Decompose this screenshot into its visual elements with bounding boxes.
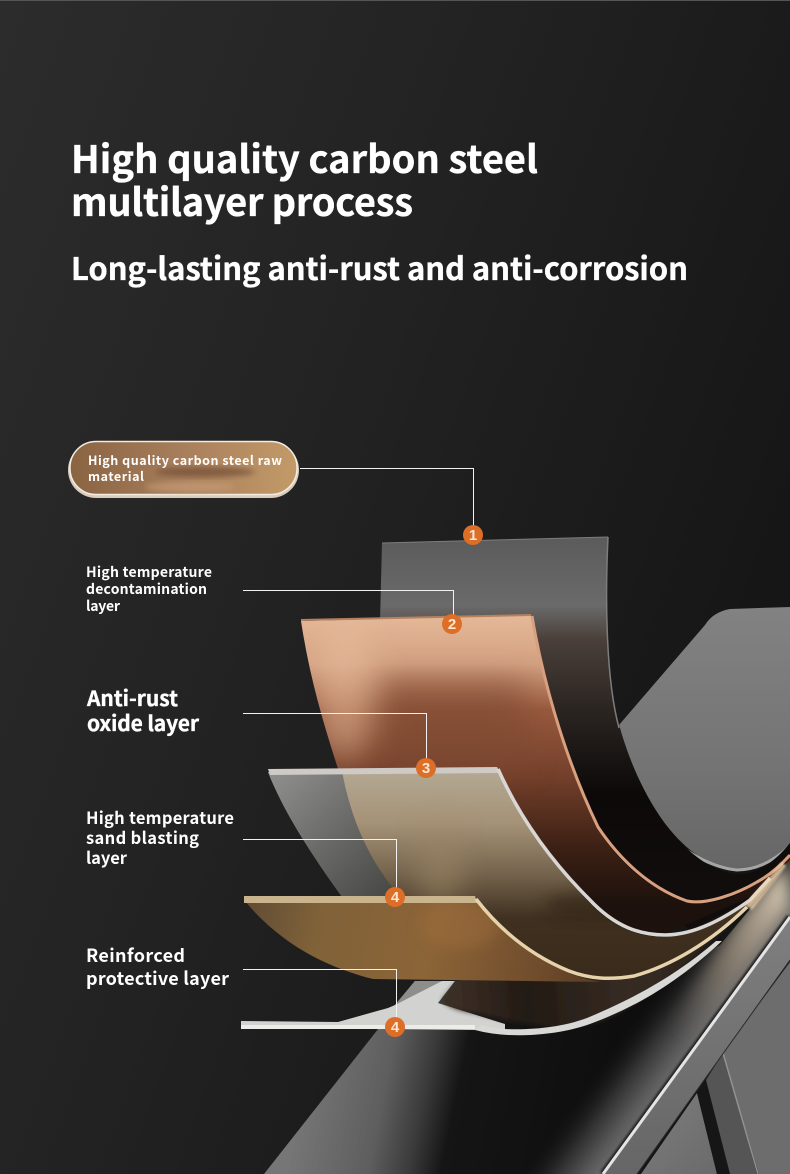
label pill: raw material: material — [88, 466, 144, 485]
badge 2: 2 — [448, 616, 456, 633]
layer 4: sand blasting gold layer — [244, 896, 747, 982]
label: anti-rust oxide layer: Anti-rust — [86, 683, 178, 713]
layer 2: copper decontamination layer — [301, 615, 790, 940]
label: anti-rust oxide layer: oxide layer — [87, 708, 200, 738]
label pill: raw material: High quality carbon steel raw — [88, 450, 282, 469]
badge 3 — [416, 758, 436, 778]
label: sand blasting layer: High temperature — [86, 805, 234, 829]
label: sand blasting layer: sand blasting — [86, 825, 199, 849]
label: reinforced protective layer: Reinforced — [86, 942, 185, 968]
badge 4 upper: 4 — [391, 889, 400, 906]
label: sand blasting layer: layer — [86, 845, 128, 869]
title: multilayer process — [71, 172, 413, 227]
right steel panels — [603, 917, 790, 1174]
label: decontamination layer: decontamination — [86, 579, 207, 599]
label: reinforced protective layer: protective layer — [86, 965, 229, 991]
label: decontamination layer: High temperature — [86, 562, 212, 582]
title — [71, 129, 538, 227]
badge 4 lower — [385, 1017, 405, 1037]
label: sand blasting layer — [86, 805, 234, 869]
badge 1 — [463, 525, 483, 545]
label pill: raw material — [68, 442, 299, 498]
layer 1: carbon steel sheet — [379, 537, 790, 930]
badge 4 upper — [385, 887, 405, 907]
convergence highlight — [745, 862, 786, 910]
badge 4 lower: 4 — [391, 1019, 400, 1036]
leader lines — [243, 468, 474, 1018]
label: decontamination layer — [86, 562, 212, 616]
label: decontamination layer: layer — [86, 596, 121, 616]
label: anti-rust oxide layer — [86, 683, 200, 738]
silver protective layer — [241, 905, 745, 1035]
title: High quality carbon steel — [71, 129, 538, 184]
layer 3: anti-rust oxide layer — [260, 765, 790, 980]
label: reinforced protective layer — [86, 942, 229, 991]
badge 2 — [442, 614, 462, 634]
foreground steel plate — [264, 850, 790, 1174]
subtitle: Long-lasting anti-rust and anti-corrosion — [71, 244, 688, 289]
badge 3: 3 — [422, 760, 430, 777]
back steel plate — [619, 607, 790, 870]
badge 1: 1 — [469, 527, 477, 544]
